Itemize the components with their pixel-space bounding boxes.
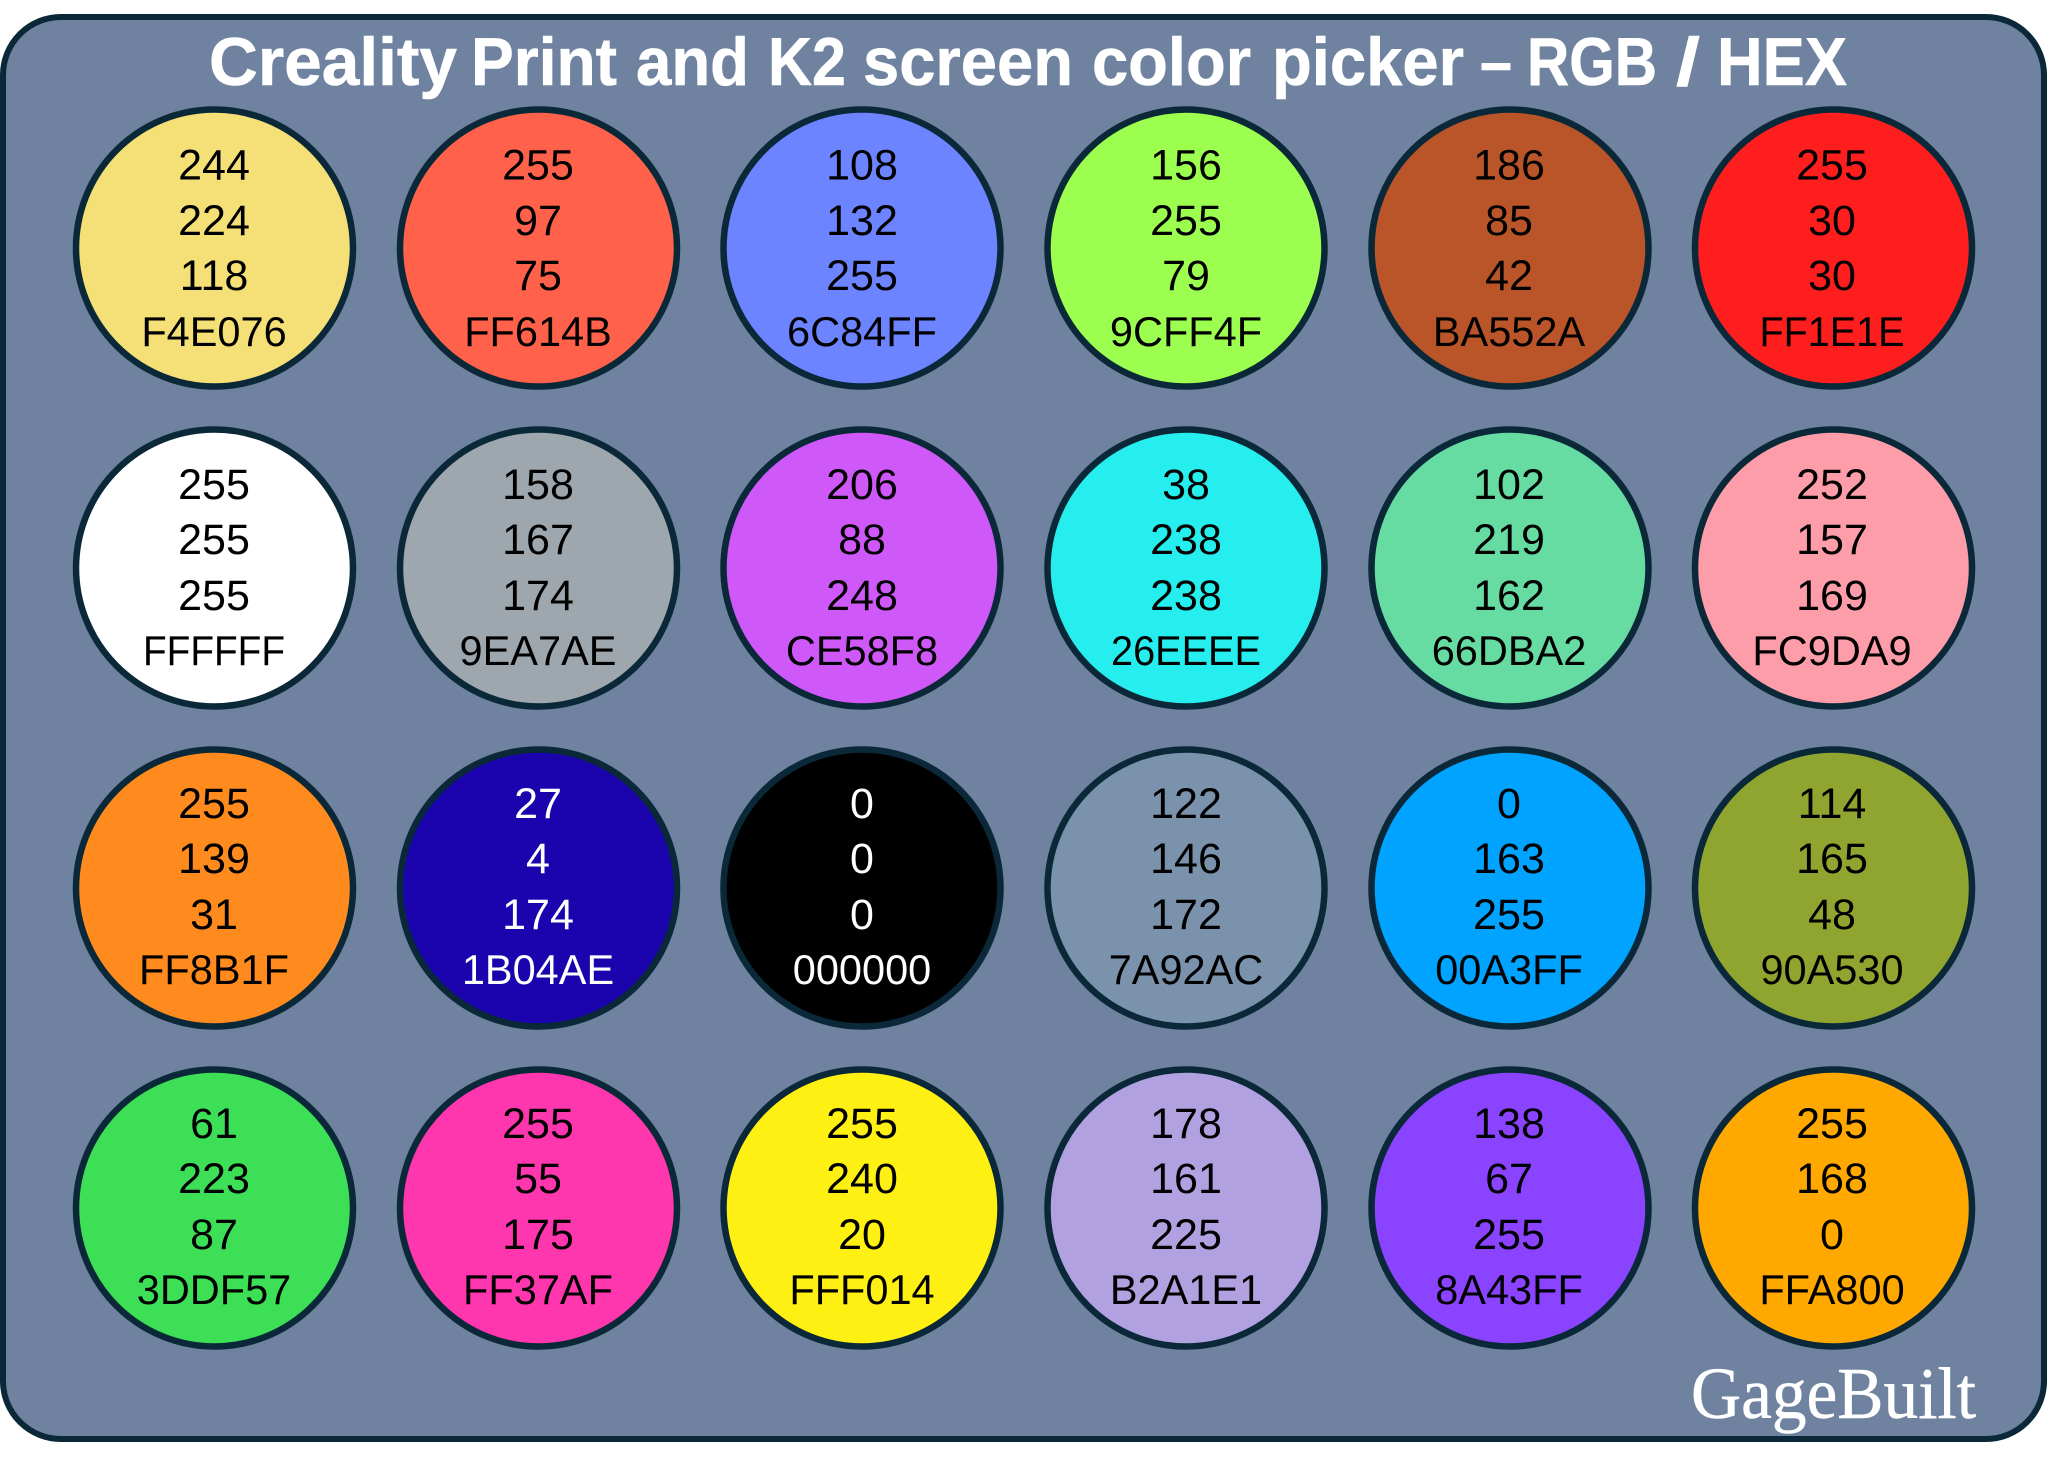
swatch: F4E076: 118 xyxy=(180,252,248,300)
swatch: FC9DA9: 252 xyxy=(1796,461,1868,509)
swatch: 6C84FF: 255 xyxy=(826,252,898,300)
title: RGB xyxy=(1527,24,1657,100)
swatch: FF614B: FF614B xyxy=(464,308,612,355)
swatch: 1B04AE: 4 xyxy=(526,835,550,883)
swatch: 8A43FF xyxy=(1372,1070,1648,1346)
swatch: 1B04AE xyxy=(400,750,677,1026)
swatch: 8A43FF: 138 xyxy=(1473,1100,1545,1148)
swatch: F4E076: 224 xyxy=(178,197,250,245)
swatch: FF1E1E: FF1E1E xyxy=(1760,308,1904,355)
swatch: 1B04AE: 27 xyxy=(514,780,562,828)
swatch: 000000: 0 xyxy=(850,891,874,939)
title: Print xyxy=(471,24,617,100)
swatch: 6C84FF xyxy=(724,110,1000,386)
swatch: FF37AF: 55 xyxy=(514,1155,562,1203)
swatch: 6C84FF: 132 xyxy=(826,197,898,245)
swatch: CE58F8: 206 xyxy=(826,461,898,509)
swatch: BA552A xyxy=(1372,110,1648,386)
title: HEX xyxy=(1717,24,1847,100)
swatch: FF37AF: FF37AF xyxy=(463,1266,613,1313)
swatch: 66DBA2: 66DBA2 xyxy=(1432,627,1586,674)
brand: GageBuilt: GageBuilt xyxy=(1691,1353,1976,1434)
swatch: FFF014 xyxy=(724,1070,1000,1346)
swatch: FF8B1F: 255 xyxy=(178,780,250,828)
swatch: 1B04AE: 1B04AE xyxy=(462,946,614,993)
swatch: FF8B1F: 139 xyxy=(178,835,250,883)
swatch: 6C84FF: 108 xyxy=(826,142,898,190)
swatch: 90A530 xyxy=(1695,750,1972,1026)
swatch: F4E076: F4E076 xyxy=(141,308,287,355)
swatch: 66DBA2: 162 xyxy=(1473,572,1545,620)
swatch: 9CFF4F: 255 xyxy=(1150,197,1222,245)
swatch: 7A92AC: 172 xyxy=(1150,891,1222,939)
swatch: 9CFF4F: 156 xyxy=(1150,142,1222,190)
swatch: 3DDF57: 61 xyxy=(190,1100,238,1148)
swatch: FF8B1F: FF8B1F xyxy=(139,946,289,993)
swatch: 26EEEE: 238 xyxy=(1150,572,1222,620)
swatch: 000000: 0 xyxy=(850,835,874,883)
swatch: FF614B: 75 xyxy=(514,252,562,300)
swatch: 9EA7AE xyxy=(400,430,677,706)
swatch: 90A530: 48 xyxy=(1808,891,1856,939)
swatch: FF37AF xyxy=(400,1070,677,1346)
swatch: 000000: 000000 xyxy=(793,946,931,993)
swatch: FF1E1E: 255 xyxy=(1796,142,1868,190)
swatch: 26EEEE: 238 xyxy=(1150,516,1222,564)
swatch: 9EA7AE: 167 xyxy=(502,516,574,564)
swatch: F4E076 xyxy=(76,110,353,386)
swatch: 90A530: 165 xyxy=(1796,835,1868,883)
swatch: 7A92AC: 122 xyxy=(1150,780,1222,828)
swatch: 9CFF4F: 79 xyxy=(1162,252,1210,300)
swatch: 26EEEE xyxy=(1048,430,1324,706)
swatch: FFA800 xyxy=(1695,1070,1972,1346)
swatch: FFFFFF xyxy=(76,430,353,706)
swatch: BA552A: 42 xyxy=(1485,252,1533,300)
swatch: 000000 xyxy=(724,750,1000,1026)
swatch: 90A530: 114 xyxy=(1798,780,1866,828)
swatch: 90A530: 90A530 xyxy=(1760,946,1904,993)
swatch: 26EEEE: 38 xyxy=(1162,461,1210,509)
swatch: FFF014: 20 xyxy=(838,1211,886,1259)
swatch: 66DBA2: 102 xyxy=(1473,461,1545,509)
swatch: FFA800: 255 xyxy=(1796,1100,1868,1148)
swatch: B2A1E1: 225 xyxy=(1150,1211,1222,1259)
swatch: FF8B1F: 31 xyxy=(190,891,238,939)
swatch: FF37AF: 255 xyxy=(502,1100,574,1148)
swatch: FFFFFF: FFFFFF xyxy=(143,627,285,674)
swatch: 3DDF57: 3DDF57 xyxy=(137,1266,291,1313)
swatch: 00A3FF: 163 xyxy=(1473,835,1545,883)
swatch: FFF014: 255 xyxy=(826,1100,898,1148)
swatch: 9EA7AE: 174 xyxy=(502,572,574,620)
swatch: 66DBA2 xyxy=(1372,430,1648,706)
title xyxy=(209,24,1847,100)
swatch: 1B04AE: 174 xyxy=(502,891,574,939)
swatch: FC9DA9: FC9DA9 xyxy=(1752,627,1912,674)
swatch: FF1E1E: 30 xyxy=(1808,197,1856,245)
swatch: B2A1E1: B2A1E1 xyxy=(1110,1266,1262,1313)
swatch: BA552A: 85 xyxy=(1485,197,1533,245)
swatch: 7A92AC: 7A92AC xyxy=(1109,946,1263,993)
swatch: 00A3FF: 00A3FF xyxy=(1435,946,1583,993)
swatch: FF37AF: 175 xyxy=(502,1211,574,1259)
swatch: BA552A: BA552A xyxy=(1433,308,1585,355)
swatch: 66DBA2: 219 xyxy=(1473,516,1545,564)
swatch: CE58F8 xyxy=(724,430,1000,706)
swatch: BA552A: 186 xyxy=(1473,142,1545,190)
swatch: CE58F8: CE58F8 xyxy=(786,627,938,674)
swatch: 3DDF57: 87 xyxy=(190,1211,238,1259)
swatch: FC9DA9 xyxy=(1695,430,1972,706)
swatch: 00A3FF: 255 xyxy=(1473,891,1545,939)
swatch: 7A92AC xyxy=(1048,750,1324,1026)
swatch: B2A1E1: 178 xyxy=(1150,1100,1222,1148)
title: color xyxy=(1092,24,1251,100)
title: K2 xyxy=(768,24,846,100)
swatch: 8A43FF: 255 xyxy=(1473,1211,1545,1259)
swatch: FC9DA9: 157 xyxy=(1796,516,1868,564)
swatch: FFF014: 240 xyxy=(826,1155,898,1203)
swatch: 9EA7AE: 9EA7AE xyxy=(460,627,616,674)
swatch: 00A3FF xyxy=(1372,750,1648,1026)
swatch: FFA800: 168 xyxy=(1796,1155,1868,1203)
title: picker xyxy=(1272,24,1464,100)
swatch: FF614B: 255 xyxy=(502,142,574,190)
swatch: 8A43FF: 67 xyxy=(1485,1155,1533,1203)
swatch: 3DDF57: 223 xyxy=(178,1155,250,1203)
title: – xyxy=(1480,24,1512,100)
swatch: F4E076: 244 xyxy=(178,142,250,190)
swatch: FFFFFF: 255 xyxy=(178,572,250,620)
swatch: B2A1E1 xyxy=(1048,1070,1324,1346)
swatch: FFA800: 0 xyxy=(1820,1211,1844,1259)
swatch: FF614B: 97 xyxy=(514,197,562,245)
swatch: CE58F8: 88 xyxy=(838,516,886,564)
swatch: 9CFF4F: 9CFF4F xyxy=(1110,308,1262,355)
swatch: FF614B xyxy=(400,110,677,386)
swatch: 26EEEE: 26EEEE xyxy=(1111,627,1261,674)
swatch: 9EA7AE: 158 xyxy=(502,461,574,509)
title: and xyxy=(636,24,749,100)
swatch: 000000: 0 xyxy=(850,780,874,828)
swatch: 7A92AC: 146 xyxy=(1150,835,1222,883)
swatch: FFFFFF: 255 xyxy=(178,516,250,564)
swatch: CE58F8: 248 xyxy=(826,572,898,620)
swatch: FF1E1E: 30 xyxy=(1808,252,1856,300)
swatch: B2A1E1: 161 xyxy=(1150,1155,1222,1203)
swatch: FFA800: FFA800 xyxy=(1759,1266,1905,1313)
swatch: FC9DA9: 169 xyxy=(1796,572,1868,620)
title: screen xyxy=(863,24,1073,100)
swatch: FF1E1E xyxy=(1695,110,1972,386)
swatch: 9CFF4F xyxy=(1048,110,1324,386)
swatch: FFF014: FFF014 xyxy=(789,1266,935,1313)
swatch: FFFFFF: 255 xyxy=(178,461,250,509)
title: Creality xyxy=(209,24,457,100)
title: / xyxy=(1676,24,1700,100)
swatch: 00A3FF: 0 xyxy=(1497,780,1521,828)
swatch: 8A43FF: 8A43FF xyxy=(1435,1266,1583,1313)
swatch: FF8B1F xyxy=(76,750,353,1026)
swatch: 3DDF57 xyxy=(76,1070,353,1346)
swatch: 6C84FF: 6C84FF xyxy=(787,308,937,355)
